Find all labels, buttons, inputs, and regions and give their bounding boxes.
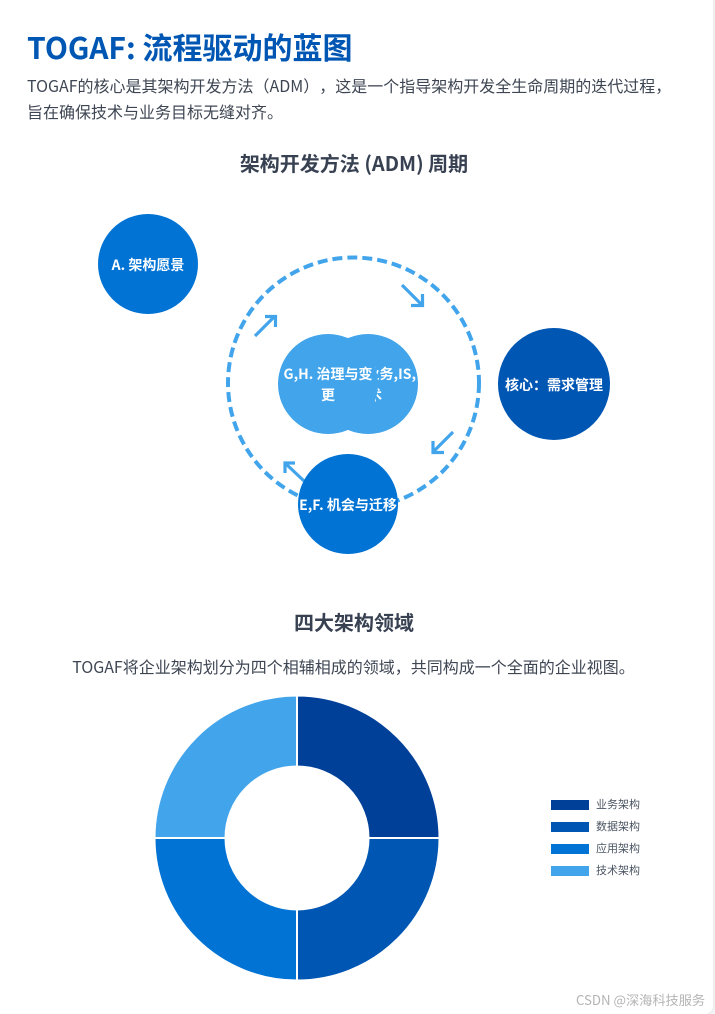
node: E,F bbox=[298, 454, 398, 554]
node: A. vision: A. 架构愿景 bbox=[112, 254, 184, 274]
domains description: TOGAF将企业架构划分为四个相辅相成的领域，共同构成一个全面的企业视图。 bbox=[72, 654, 635, 678]
intro text: 旨在确保技术与业务目标无缝对齐。 bbox=[27, 99, 283, 123]
dashed cycle ring and arrows bbox=[226, 256, 481, 502]
intro text: TOGAF的核心是其架构开发方法（ADM），这是一个指导架构开发全生命周期的迭代过程， bbox=[27, 73, 671, 97]
heading: ADM cycle: 架构开发方法 (ADM) 周期 bbox=[240, 148, 468, 177]
node: B,C,D: B,C,D. 业务,IS, bbox=[320, 364, 416, 384]
segment: data bbox=[297, 838, 440, 980]
legend: 技术架构 bbox=[596, 862, 640, 878]
heading: four domains: 四大架构领域 bbox=[294, 607, 414, 636]
intro text bbox=[27, 73, 671, 123]
watermark: CSDN @深海科技服务 bbox=[576, 990, 705, 1009]
node: A. vision bbox=[98, 214, 198, 314]
title: TOGAF: 流程驱动的蓝图 bbox=[27, 24, 353, 68]
segment: business bbox=[297, 696, 440, 838]
node: G,H: G,H. 治理与变 bbox=[284, 364, 372, 384]
donut chart bbox=[156, 696, 438, 980]
node: B,C,D bbox=[318, 334, 418, 434]
segment: application bbox=[154, 838, 297, 980]
diagram: ADM cycle bbox=[98, 214, 610, 554]
segment: technology bbox=[154, 696, 297, 838]
node: G,H: 更 bbox=[321, 385, 335, 405]
legend: 数据架构 bbox=[596, 818, 640, 834]
node: G,H bbox=[278, 334, 378, 434]
legend: 业务架构 bbox=[596, 796, 640, 812]
node: core requirements bbox=[498, 328, 610, 440]
legend bbox=[551, 796, 640, 878]
node: B,C,D: 技术 bbox=[354, 385, 382, 405]
node: core requirements: 核心：需求管理 bbox=[505, 374, 603, 394]
legend: 应用架构 bbox=[596, 840, 640, 856]
node: E,F: E,F. 机会与迁移 bbox=[299, 494, 397, 514]
